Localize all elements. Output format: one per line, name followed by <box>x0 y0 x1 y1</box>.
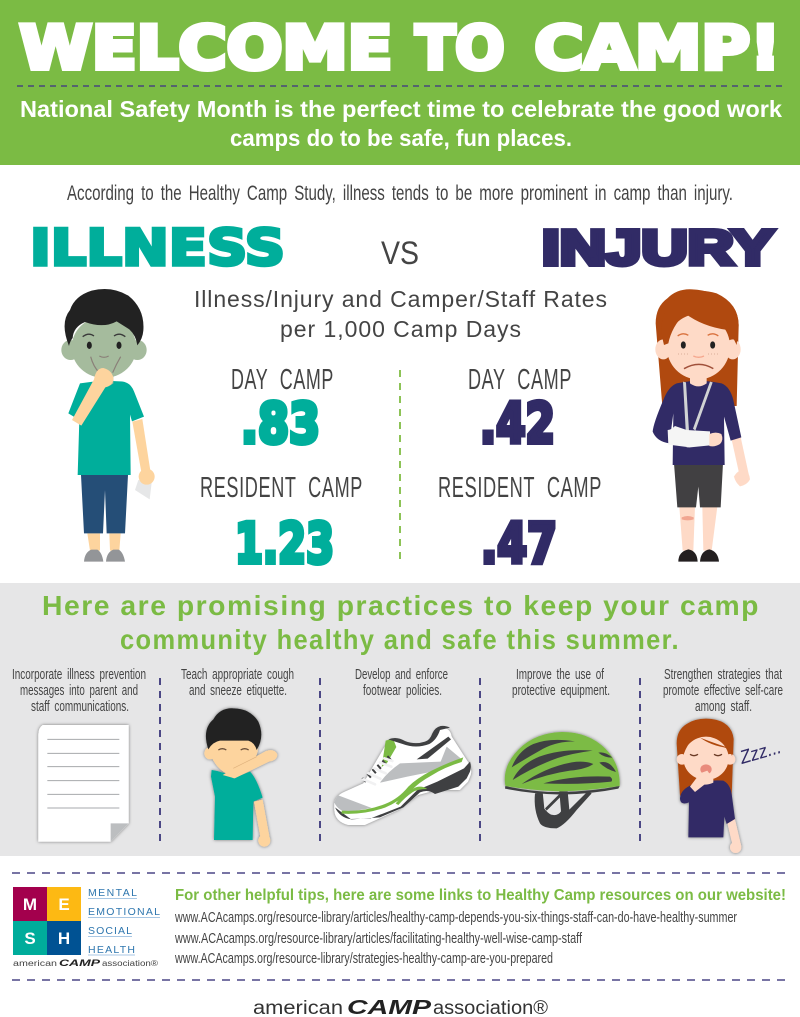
logo: MESH: american <box>13 959 57 968</box>
icon: sick boy <box>61 289 155 562</box>
stat: illness day camp: .83 <box>241 392 320 456</box>
practice 1: communications: Incorporate illness prevention <box>12 666 146 683</box>
icon: running shoe <box>334 726 471 825</box>
logo: MESH: association® <box>102 959 158 968</box>
title: CAMP! <box>534 14 780 84</box>
heading: vs: VS <box>381 235 419 271</box>
resources block <box>174 887 786 967</box>
practices heading: community healthy and safe this summer. <box>120 624 680 655</box>
logo: MESH: EMOTIONAL <box>88 906 160 918</box>
logo: MESH: M <box>23 895 37 914</box>
zzz text: Zzz... <box>737 737 784 769</box>
stat: injury resident camp: .47 <box>481 512 557 576</box>
practice 4: protective equipment: Improve the use of <box>516 666 605 683</box>
title: WELCOME <box>20 14 392 84</box>
icon: document <box>38 725 129 842</box>
logo: MESH: E <box>58 895 70 914</box>
practice 1: communications: staff communications. <box>31 698 129 715</box>
practice 4: protective equipment: protective equipment. <box>512 682 610 699</box>
logo: MESH <box>13 887 160 968</box>
panel: promising practices <box>0 583 800 856</box>
practice 2: cough etiquette: Teach appropriate cough <box>181 666 294 683</box>
practice 4: protective equipment <box>505 666 620 828</box>
stat: illness day camp: DAY CAMP <box>231 364 334 396</box>
resources block: www.ACAcamps.org/resource-library/strategies-healthy-camp-are-you-prepared <box>174 950 553 967</box>
practice 3: footwear <box>334 666 471 825</box>
rates heading: per 1,000 Camp Days <box>280 316 521 342</box>
icon: helmet <box>505 732 620 828</box>
title <box>20 14 780 84</box>
practice 1: communications: messages into parent and <box>20 682 138 699</box>
stat: illness resident camp: 1.23 <box>235 512 334 576</box>
icon: yawning girl <box>677 719 741 853</box>
stat: injury day camp: DAY CAMP <box>468 364 572 396</box>
title: TO <box>416 14 504 84</box>
stat: illness resident camp: RESIDENT CAMP <box>200 472 363 504</box>
practice 1: communications <box>12 666 146 842</box>
stat: injury day camp <box>468 364 572 456</box>
logo: MESH: SOCIAL <box>88 925 132 937</box>
stat: injury day camp: .42 <box>480 392 555 456</box>
practices heading: Here are promising practices to keep your camp <box>42 590 760 621</box>
footer logo <box>253 997 548 1017</box>
practice 2: cough etiquette: and sneeze etiquette. <box>189 682 287 699</box>
logo: MESH: HEALTH <box>88 944 135 956</box>
logo: MESH: CAMP <box>59 958 102 968</box>
logo: MESH: H <box>58 929 70 948</box>
header subtitle: National Safety Month is the perfect time to celebrate the good work <box>20 96 782 122</box>
practice 2: cough etiquette <box>181 666 294 847</box>
practice 5: self-care: among staff. <box>695 698 752 715</box>
stat: illness resident camp <box>200 472 363 576</box>
stat: injury resident camp <box>438 472 602 576</box>
stat: illness day camp <box>231 364 334 456</box>
icon: injured girl <box>653 289 750 562</box>
practice 5: self-care <box>663 666 784 853</box>
rates heading: Illness/Injury and Camper/Staff Rates <box>194 286 607 312</box>
icon: boy coughing into elbow <box>204 708 277 847</box>
logo: MESH: S <box>24 929 36 948</box>
heading: illness: ILLNESS <box>30 219 285 277</box>
practice 3: footwear: footwear policies. <box>363 682 442 699</box>
header subtitle: camps do to be safe, fun places. <box>230 125 572 151</box>
logo: MESH: MENTAL <box>88 887 137 899</box>
stat: injury resident camp: RESIDENT CAMP <box>438 472 602 504</box>
resources block: www.ACAcamps.org/resource-library/articles/facilitating-healthy-well-wise-camp-staff <box>174 930 583 947</box>
practice 3: footwear: Develop and enforce <box>355 666 448 683</box>
panel: green header <box>0 0 800 165</box>
heading: injury: INJURY <box>542 222 774 276</box>
